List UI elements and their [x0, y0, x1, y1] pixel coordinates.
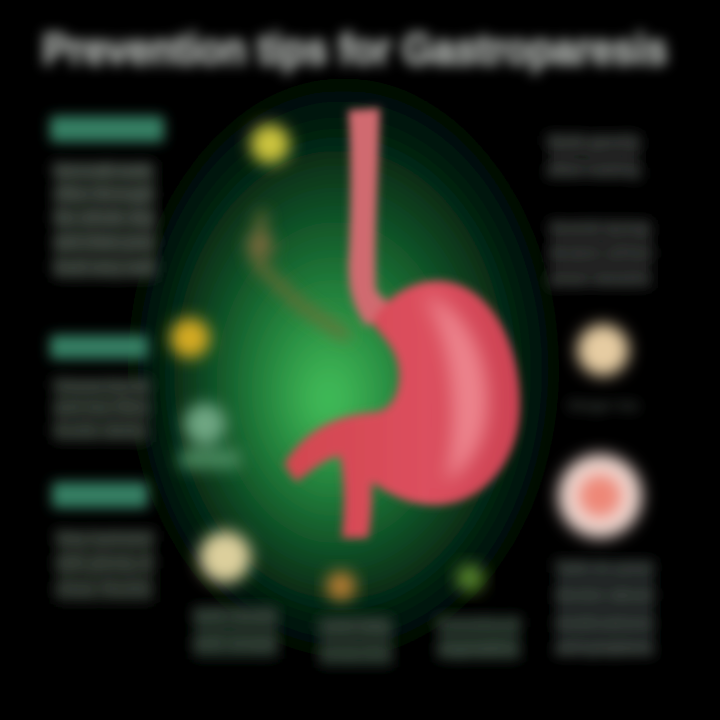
text block: bottom one: Soft foods — [192, 607, 278, 624]
stomach body — [284, 281, 520, 538]
text block: food very well — [52, 258, 156, 277]
text block: right second: Avoid lying — [548, 219, 648, 236]
icon: gold circle left — [170, 318, 210, 358]
text block: and chew your — [52, 232, 156, 251]
text block: right lower: Talk to your — [554, 559, 654, 576]
text block: often through — [52, 184, 154, 203]
icon: pale green item — [180, 403, 240, 468]
text block — [53, 529, 155, 602]
text block: bottom two: snacks — [318, 645, 392, 662]
text block: right second: down after — [548, 245, 654, 262]
text block: Eat small meals — [52, 160, 152, 179]
icon: green circle bottom — [456, 564, 484, 592]
heading badge — [50, 335, 148, 359]
text block: bottom one — [192, 606, 278, 658]
panel: left top — [50, 116, 164, 280]
text block: right lower: and symptoms — [554, 641, 654, 658]
text block: right top — [546, 133, 641, 180]
title: Prevention tips for Gastroparesis — [42, 25, 668, 74]
text block: bottom three: Cooked — [436, 615, 520, 632]
text block: right second — [548, 219, 654, 288]
text block: right lower: doctor about — [554, 587, 655, 604]
green radial glow — [120, 60, 570, 670]
icon: cream circle right — [577, 324, 629, 376]
text block: Choose low fat — [52, 377, 151, 394]
icon: cream circle bottom — [199, 531, 251, 583]
text block: right lower: medications — [554, 615, 654, 632]
text block: foods daily — [52, 423, 144, 440]
icon: yellow circle top — [250, 124, 290, 164]
stomach highlight — [425, 295, 487, 482]
text block: Stay hydrated — [54, 529, 154, 546]
text block: with plenty of — [53, 555, 155, 572]
text block — [52, 160, 157, 280]
text block: right lower — [554, 559, 655, 658]
panel: left middle — [50, 335, 151, 442]
text block: the whole day — [52, 208, 157, 227]
icon: orange circle bottom — [326, 571, 356, 601]
esophagus — [348, 108, 396, 326]
text block — [52, 377, 151, 442]
text block: bottom two — [318, 616, 393, 666]
stomach — [284, 108, 520, 538]
heading badge — [52, 482, 148, 508]
text block: bottom one: and soups — [192, 635, 278, 652]
text block: bottom two: Limit fatty — [318, 617, 393, 634]
icon: pink white circle — [558, 454, 642, 538]
icon: brown branches — [246, 215, 345, 335]
text block: bottom three: vegetables — [436, 641, 520, 658]
text block: and low fibre — [52, 399, 150, 416]
heading badge — [50, 116, 164, 142]
text block: bottom three — [436, 615, 520, 660]
text block: right top: Walk gently — [546, 133, 641, 150]
text block: right top: after eating — [546, 163, 641, 180]
panel: left bottom — [52, 482, 155, 602]
label: right cream: Ginger tea — [568, 397, 638, 413]
text block: right second: your meals — [548, 271, 648, 288]
text block: clear fluids — [54, 581, 150, 598]
